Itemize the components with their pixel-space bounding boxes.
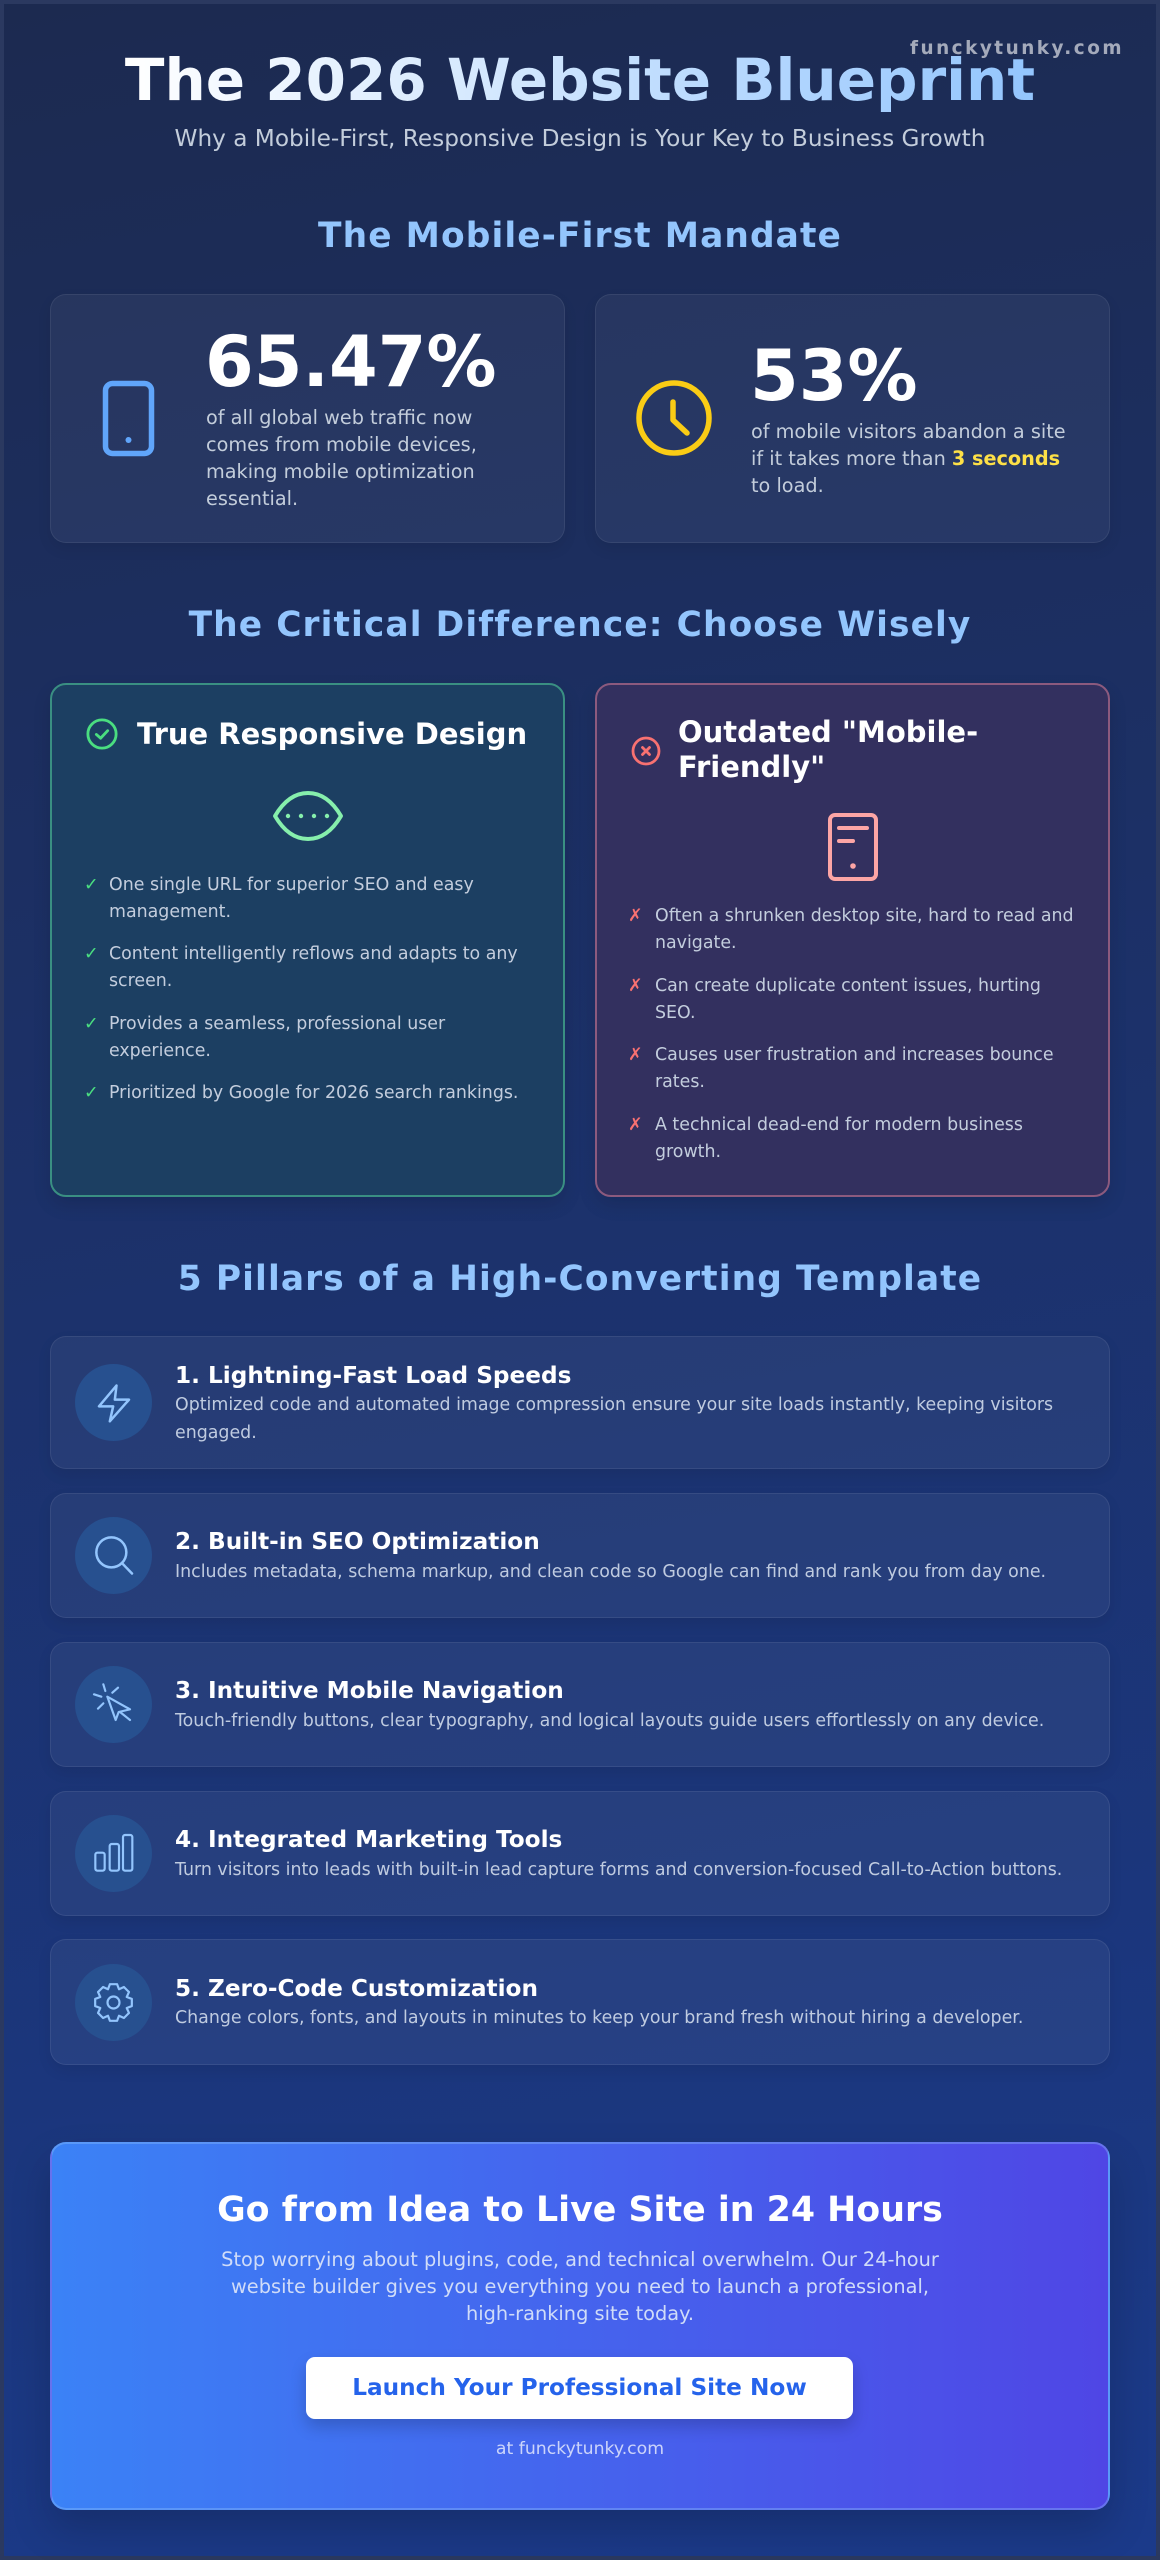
benefit list: screen. — [109, 970, 172, 990]
drawback list: navigate. — [655, 932, 737, 952]
icon: clock — [636, 380, 712, 456]
benefit list — [84, 874, 518, 1102]
pillar 1 description: Optimized code and automated image compression ensure your site loads instantly, keeping visitors — [175, 1395, 1053, 1415]
panel heading: True Responsive Design — [137, 717, 527, 751]
drawback list: ✗ — [628, 906, 643, 926]
heading: 5 pillars: 5 Pillars of a High-Converting Template — [178, 1259, 982, 1299]
panel: pillar 5 — [50, 1939, 1110, 2065]
panel heading: Outdated "Mobile- — [678, 715, 978, 749]
CTA description: website builder gives you everything you need to launch a professional, — [231, 2274, 929, 2298]
title: The 2026 Website Blueprint — [125, 46, 1035, 114]
stat description: making mobile optimization — [206, 460, 475, 483]
drawback list: rates. — [655, 1072, 705, 1092]
CTA button — [306, 2357, 853, 2419]
subtitle: Why a Mobile-First, Responsive Design is Your Key to Business Growth — [175, 125, 985, 152]
CTA heading: Go from Idea to Live Site in 24 Hours — [217, 2190, 943, 2230]
icon: check circle — [86, 718, 118, 750]
stat description: if it takes more than 3 seconds — [751, 447, 1060, 470]
stat description: of all global web traffic now — [206, 406, 472, 429]
stat description — [751, 420, 1066, 497]
pillar 3 description: Touch-friendly buttons, clear typography, and logical layouts guide users effortlessly on any device. — [175, 1710, 1044, 1730]
panel: stat 65.47% — [50, 294, 565, 543]
stat number: 65.47% — [205, 321, 497, 403]
pillar 1 description — [175, 1395, 1053, 1442]
benefit list: ✓ — [84, 944, 99, 964]
panel: pillar 1 — [50, 1336, 1110, 1469]
stat description: to load. — [751, 474, 824, 497]
drawback list: Causes user frustration and increases bounce — [655, 1044, 1054, 1064]
benefit list: ✓ — [84, 874, 99, 894]
pillar 5 description: Change colors, fonts, and layouts in minutes to keep your brand fresh without hiring a developer. — [175, 2008, 1023, 2028]
watermark: funckytunky.com — [910, 38, 1124, 59]
panel: stat 53% — [595, 294, 1110, 543]
benefit list: management. — [109, 902, 231, 922]
panel heading: Friendly" — [678, 750, 825, 784]
benefit list: Content intelligently reflows and adapts to any — [109, 944, 518, 964]
panel: outdated mobile-friendly — [595, 683, 1110, 1197]
icon: gear — [74, 1964, 152, 2041]
drawback list — [628, 906, 1074, 1162]
icon: bar chart — [74, 1815, 152, 1892]
pillar 2 description: Includes metadata, schema markup, and clean code so Google can find and rank you from day one. — [175, 1562, 1046, 1582]
pillar 5 title: 5. Zero-Code Customization — [175, 1975, 538, 2002]
panel: pillar 4 — [50, 1790, 1110, 1916]
drawback list: ✗ — [628, 1044, 643, 1064]
panel: call to action — [50, 2142, 1110, 2510]
CTA description — [221, 2248, 939, 2324]
icon: x circle — [632, 736, 660, 766]
drawback list: ✗ — [628, 1114, 643, 1134]
drawback list: A technical dead-end for modern business — [655, 1114, 1023, 1134]
icon: lightning bolt — [74, 1364, 152, 1441]
heading: critical difference: The Critical Difference: Choose Wisely — [189, 605, 971, 645]
panel: true responsive design — [50, 683, 565, 1197]
benefit list: ✓ — [84, 1082, 99, 1102]
panel heading — [678, 715, 978, 784]
heading: mobile-first mandate: The Mobile-First Mandate — [318, 216, 842, 256]
icon: responsive lens — [273, 791, 343, 841]
benefit list: One single URL for superior SEO and easy — [109, 874, 474, 894]
stat description — [206, 406, 477, 510]
icon: phone — [102, 380, 154, 456]
drawback list: Can create duplicate content issues, hurting — [655, 976, 1041, 996]
CTA description: Stop worrying about plugins, code, and technical overwhelm. Our 24-hour — [221, 2248, 939, 2270]
pillar 4 description: Turn visitors into leads with built-in lead capture forms and conversion-focused Call-to-Action buttons. — [175, 1860, 1062, 1880]
CTA button: Launch Your Professional Site Now — [352, 2374, 807, 2401]
drawback list: SEO. — [655, 1002, 696, 1022]
stat number: 53% — [750, 335, 918, 417]
stat description: comes from mobile devices, — [206, 433, 477, 456]
pillar 1 description: engaged. — [175, 1422, 257, 1442]
drawback list: Often a shrunken desktop site, hard to read and — [655, 906, 1074, 926]
CTA footnote: at funckytunky.com — [496, 2439, 664, 2459]
drawback list: growth. — [655, 1142, 721, 1162]
icon: magnifier — [74, 1517, 152, 1594]
panel: pillar 2 — [50, 1492, 1110, 1618]
benefit list: ✓ — [84, 1014, 99, 1034]
CTA description: high-ranking site today. — [466, 2302, 694, 2324]
pillar 2 title: 2. Built-in SEO Optimization — [175, 1528, 540, 1555]
benefit list: Provides a seamless, professional user — [109, 1014, 445, 1034]
stat description: essential. — [206, 487, 298, 510]
icon: legacy device — [828, 813, 878, 881]
panel: pillar 3 — [50, 1642, 1110, 1767]
benefit list: experience. — [109, 1040, 211, 1060]
icon: cursor click — [74, 1666, 152, 1743]
pillar 3 title: 3. Intuitive Mobile Navigation — [175, 1677, 564, 1704]
drawback list: ✗ — [628, 976, 643, 996]
benefit list: Prioritized by Google for 2026 search rankings. — [109, 1082, 518, 1102]
stat description: of mobile visitors abandon a site — [751, 420, 1066, 443]
pillar 1 title: 1. Lightning-Fast Load Speeds — [175, 1362, 571, 1389]
pillar 4 title: 4. Integrated Marketing Tools — [175, 1826, 562, 1852]
